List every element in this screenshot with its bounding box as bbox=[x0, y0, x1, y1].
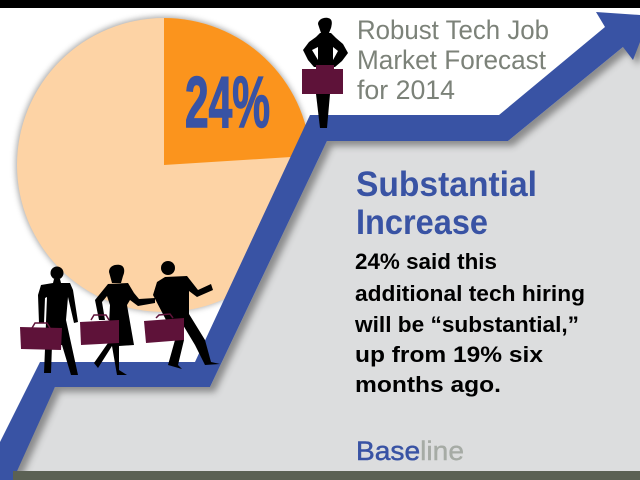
figure: man right with briefcase bbox=[144, 261, 220, 369]
top black bar bbox=[0, 0, 640, 8]
title: Robust Tech Job bbox=[357, 15, 549, 45]
heading: Increase bbox=[356, 203, 488, 242]
title: Market Forecast bbox=[357, 45, 546, 75]
bottom bar bbox=[13, 471, 640, 480]
figure: woman with briefcase bbox=[80, 265, 155, 375]
body text: 24% said this bbox=[355, 249, 497, 274]
figure: man left with briefcase bbox=[20, 266, 78, 375]
body text: up from 19% six bbox=[355, 342, 544, 367]
title: for 2014 bbox=[357, 75, 455, 105]
24% label: 24% bbox=[185, 63, 270, 143]
heading bbox=[356, 165, 537, 242]
pie chart bbox=[16, 16, 312, 312]
heading: Substantial bbox=[356, 165, 537, 204]
figure: person on top with briefcase bbox=[302, 18, 348, 128]
body text: months ago. bbox=[355, 372, 501, 397]
body text: additional tech hiring bbox=[355, 281, 585, 306]
body text: will be “substantial,” bbox=[354, 312, 579, 337]
body text bbox=[354, 249, 585, 397]
logo: Baseline: Baseline bbox=[356, 436, 464, 466]
pie slice: 24% bbox=[164, 18, 311, 165]
title bbox=[357, 15, 549, 105]
